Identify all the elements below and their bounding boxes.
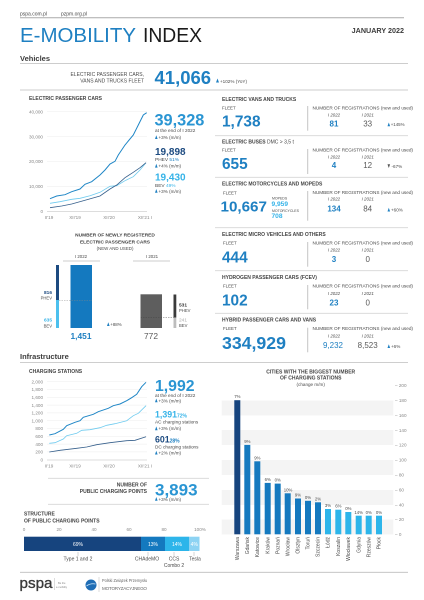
bar values: 0% — [275, 478, 281, 483]
panel: electric vans and trucks: I 2021 — [362, 112, 374, 117]
bar values: 6% — [335, 504, 342, 509]
logo: PZPM: MOTORYZACYJNEGO — [102, 586, 147, 591]
panel: hybrid cars: NUMBER OF REGISTRATIONS (new and used) — [312, 326, 413, 331]
panel: cities chart — [222, 369, 407, 561]
panel: electric buses: FLEET — [222, 148, 236, 153]
line chart: passenger cars: XII'20 — [103, 215, 115, 220]
panel: structure of public charging points: 0 — [23, 527, 26, 532]
logo: pspa: pspa — [20, 576, 53, 592]
panel: hybrid cars: I 2021 — [362, 333, 374, 338]
panel: structure of public charging points: Tesla — [189, 557, 201, 563]
stacked bar: 14% — [172, 542, 183, 548]
panel: electric vans and trucks: I 2022 — [328, 112, 341, 117]
line chart: charging stations: 1,400 — [32, 403, 43, 408]
stacked bar — [24, 537, 200, 551]
date: JANUARY 2022 — [352, 26, 404, 35]
bar values: 9% — [244, 439, 251, 444]
stacked bar: 13% — [148, 542, 159, 548]
logo: pspa: e-mobility — [56, 585, 68, 589]
panel: electric motorcycles and mopeds: 10,667 — [220, 199, 267, 216]
panel: structure of public charging points: CHAdeMO — [135, 557, 159, 563]
panel: micro vehicles: FLEET — [223, 241, 237, 246]
panel: micro vehicles: 0 — [365, 255, 370, 264]
panel: electric motorcycles and mopeds: 9,959 — [272, 201, 288, 208]
stat: public charging points: 3,893 — [155, 481, 198, 500]
panel: electric vans and trucks: ELECTRIC VANS AND TRUCKS — [222, 97, 297, 103]
line chart: passenger cars: 30,000 — [29, 134, 43, 139]
stacked bar: 4% — [191, 542, 198, 548]
bar: I 2021: PHEV — [179, 308, 191, 313]
panel: cities chart: (change m/m) — [297, 382, 325, 387]
line chart: charging stations: II'19 — [45, 464, 54, 468]
panel: charging stations — [29, 369, 199, 468]
panel: electric vans and trucks — [222, 97, 413, 131]
bar: I 2022: BEV — [44, 323, 52, 328]
line chart: passenger cars: XII'21 I — [138, 215, 152, 220]
axis labels — [395, 383, 407, 537]
panel: electric buses: I 2021 — [362, 154, 374, 159]
panel: hydrogen cars: 102 — [222, 293, 248, 310]
panel: electric motorcycles and mopeds: +60% — [391, 207, 403, 212]
bar values: 0% — [376, 510, 382, 515]
panel: hybrid cars: HYBRID PASSENGER CARS AND VANS — [222, 318, 317, 324]
panel: electric vans and trucks: 33 — [363, 120, 373, 129]
panel: cities chart: CITIES WITH THE BIGGEST NUMBER — [266, 369, 356, 375]
stat: AC stations: +3% (m/m) — [158, 426, 182, 431]
panel: electric buses: 12 — [363, 161, 373, 170]
panel: hybrid cars: +6% — [391, 344, 400, 349]
axis labels: – 40 — [395, 502, 404, 507]
panel: electric vans and trucks: 81 — [330, 120, 339, 129]
city labels — [235, 537, 383, 561]
stat: public charging points — [80, 481, 198, 502]
panel: structure of public charging points: 20 — [56, 527, 62, 532]
line chart: charging stations: 800 — [35, 426, 43, 431]
bar values: 9% — [295, 493, 301, 498]
line chart: charging stations: 400 — [35, 442, 43, 447]
bar: I 2022: 816 — [44, 290, 52, 296]
bar: I 2021: 241 — [179, 317, 187, 323]
stacked bar: 69% — [73, 542, 84, 548]
stat: DC stations: +2% (m/m) — [158, 450, 182, 456]
axis labels: – 120 — [395, 443, 407, 448]
line chart: charging stations: 2,000 — [32, 379, 43, 384]
axis labels: – 180 — [395, 398, 407, 403]
city labels: Poznań — [275, 537, 281, 554]
panel: electric buses: 655 — [222, 156, 248, 173]
axis labels: – 20 — [395, 517, 404, 522]
heading: vehicles: Vehicles — [20, 54, 50, 63]
panel: structure of public charging points: 40 — [91, 527, 97, 532]
stat: PHEV: 19,898 — [155, 147, 186, 158]
stat: BEV: +3% (m/m) — [158, 189, 182, 194]
panel: newly registered cars — [41, 233, 191, 341]
line chart: charging stations: 0 — [40, 458, 43, 463]
panel: hydrogen cars: NUMBER OF REGISTRATIONS (new and used) — [312, 283, 413, 288]
stat: public charging points: +3% (m/m) — [158, 497, 182, 502]
line chart: charging stations: XII'21 I — [138, 464, 152, 468]
bars — [234, 400, 382, 534]
panel: hydrogen cars: 23 — [330, 298, 339, 307]
panel: newly registered cars: ELECTRIC PASSENGER CARS — [80, 240, 151, 246]
stat: BEV: 19,430 — [155, 173, 186, 184]
panel: electric buses: 4 — [332, 161, 337, 170]
axis labels: – 140 — [395, 428, 407, 433]
panel: newly registered cars: NUMBER OF NEWLY REGISTERED — [75, 233, 155, 239]
panel: electric motorcycles and mopeds: NUMBER OF REGISTRATIONS (new and used) — [312, 190, 413, 195]
stat: PHEV — [155, 147, 186, 169]
city labels: Koszalin — [336, 537, 342, 556]
line chart: charging stations: 200 — [35, 450, 43, 455]
panel: electric passenger cars: ELECTRIC PASSENGER CARS — [29, 96, 103, 102]
city labels: Gdynia — [356, 537, 362, 553]
header links: pzpm.org.pl — [61, 12, 87, 18]
line chart: passenger cars: 0 — [40, 209, 43, 214]
panel: electric motorcycles and mopeds: I 2021 — [362, 197, 374, 202]
bar values: 0% — [366, 510, 372, 515]
stat: AC stations: AC charging stations — [155, 420, 199, 425]
city labels: Toruń — [306, 537, 312, 550]
line chart: charging stations: 600 — [35, 434, 43, 439]
total fleet callout: 41,066 — [154, 67, 211, 88]
panel: micro vehicles: NUMBER OF REGISTRATIONS (new and used) — [312, 241, 413, 246]
panel: structure of public charging points: 80 — [161, 527, 167, 532]
city labels: Szczecin — [316, 537, 322, 557]
panel: hydrogen cars: 0 — [365, 298, 370, 307]
panel: electric motorcycles and mopeds: 134 — [327, 205, 341, 214]
line chart: charging stations: XII'19 — [69, 464, 81, 468]
panel: micro vehicles: I 2021 — [362, 248, 374, 253]
stat: total stations: +3% (m/m) — [158, 398, 182, 403]
panel: structure of public charging points — [23, 512, 206, 569]
panel: electric buses: NUMBER OF REGISTRATIONS (new and used) — [312, 148, 413, 153]
city labels: Rzeszów — [366, 537, 372, 557]
panel: newly registered cars: I 2021 — [146, 254, 159, 259]
panel: cities chart: OF CHARGING STATIONS — [280, 376, 342, 382]
city labels: Warszawa — [235, 537, 241, 560]
stat: AC stations — [155, 410, 199, 431]
panel: electric motorcycles and mopeds: 84 — [363, 205, 373, 214]
stat: BEV: BEV 49% — [155, 183, 176, 189]
chart bands — [222, 400, 393, 534]
panel: newly registered cars: (NEW AND USED) — [97, 246, 134, 251]
axis labels: – 100 — [395, 458, 407, 463]
bar values: 0% — [305, 495, 311, 500]
panel: micro vehicles — [222, 232, 413, 267]
total fleet callout: +102% (YoY) — [220, 79, 247, 84]
axis labels: – 80 — [395, 472, 404, 478]
title: E-MOBILITY — [20, 25, 136, 47]
total fleet callout — [70, 67, 247, 88]
city labels: Kraków — [265, 537, 271, 554]
panel: electric vans and trucks: 1,738 — [222, 114, 261, 131]
stat: total stations: at the end of I 2022 — [155, 393, 196, 398]
bar values: 6% — [265, 477, 271, 482]
stat: DC stations — [155, 435, 199, 456]
panel: electric buses: -67% — [392, 164, 402, 169]
line chart: passenger cars — [29, 109, 152, 220]
city labels: Olsztyn — [296, 537, 302, 554]
bar: I 2022 — [41, 265, 92, 341]
stat: DC stations: 601 28% — [155, 435, 180, 445]
panel: hydrogen cars: I 2022 — [328, 291, 341, 296]
panel: structure of public charging points: 100% — [194, 527, 206, 532]
panel: structure of public charging points: Combo 2 — [164, 563, 184, 569]
line chart: charging stations: 1,200 — [32, 411, 43, 416]
panel: charging stations: CHARGING STATIONS — [29, 369, 83, 375]
panel: hybrid cars: FLEET — [223, 326, 237, 331]
logo: PZPM — [86, 577, 147, 592]
bar: I 2021: BEV — [179, 323, 188, 328]
stat: total passenger cars: 39,328 — [154, 112, 204, 130]
stat: DC stations: DC charging stations — [155, 444, 199, 450]
change: newly registered: +88% — [110, 322, 122, 327]
panel: hybrid cars: 334,929 — [222, 333, 286, 353]
panel: hydrogen cars: I 2021 — [362, 291, 374, 296]
logo: pspa — [20, 576, 68, 592]
logo: PZPM: Polski Związek Przemysłu — [102, 578, 147, 583]
line chart: passenger cars: 20,000 — [29, 159, 43, 164]
panel: micro vehicles: ELECTRIC MICRO VEHICLES AND OTHERS — [222, 232, 326, 238]
bar: I 2022: 1,451 — [71, 331, 92, 341]
title: INDEX — [143, 25, 202, 47]
total fleet callout: ELECTRIC PASSENGER CARS, — [70, 72, 144, 78]
stat: total passenger cars — [154, 112, 204, 140]
bar values: 9% — [254, 456, 261, 460]
panel: electric motorcycles and mopeds: I 2022 — [328, 197, 341, 202]
stat: total stations — [155, 378, 196, 403]
panel: electric motorcycles and mopeds: MOPEDS — [272, 197, 288, 201]
axis labels: – 0 — [395, 532, 402, 537]
line chart: charging stations — [32, 379, 152, 468]
line chart: charging stations: XII'20 — [103, 464, 115, 468]
line chart: charging stations: 1,800 — [32, 387, 43, 392]
panel: structure of public charging points: OF PUBLIC CHARGING POINTS — [24, 519, 100, 525]
bar: I 2022: 635 — [44, 318, 52, 324]
panel: electric motorcycles and mopeds: ELECTRIC MOTORCYCLES AND MOPEDS — [222, 182, 323, 188]
panel: hybrid cars: 8,523 — [358, 341, 378, 350]
stat: total passenger cars: +3% (m/m) — [158, 135, 182, 140]
panel: electric motorcycles and mopeds — [220, 182, 413, 221]
stat: total passenger cars: at the end of I 2022 — [155, 128, 196, 133]
panel: hydrogen cars — [222, 275, 413, 310]
line chart: charging stations: 1,600 — [32, 395, 43, 400]
total fleet callout: VANS AND TRUCKS FLEET — [80, 78, 144, 84]
bar values: 2% — [315, 496, 321, 502]
bar: I 2022: PHEV — [41, 296, 52, 301]
axis labels: – 60 — [395, 487, 404, 492]
city labels: Katowice — [255, 537, 261, 557]
header links: pspa.com.pl — [20, 12, 47, 18]
panel: electric motorcycles and mopeds: MOTORCYCLES — [272, 209, 300, 213]
stat: AC stations: 1,391 72% — [155, 410, 188, 420]
panel: electric passenger cars — [29, 96, 204, 220]
bar values: 14% — [354, 510, 363, 515]
line chart: passenger cars: XII'19 — [69, 215, 81, 220]
panel: electric vans and trucks: +145% — [391, 122, 405, 127]
bar: I 2021: 531 — [179, 303, 187, 309]
bar values: 7% — [234, 394, 241, 399]
panel: electric buses: I 2022 — [328, 154, 341, 159]
bar: I 2021: 772 — [144, 331, 158, 341]
panel: newly registered cars: I 2022 — [75, 254, 88, 259]
bar values: 10% — [284, 488, 292, 492]
line chart: passenger cars: II'19 — [45, 215, 54, 220]
title — [20, 25, 202, 47]
stat: total stations: 1,992 — [155, 378, 195, 395]
panel: micro vehicles: 444 — [222, 249, 248, 266]
stat: public charging points: PUBLIC CHARGING POINTS — [80, 489, 148, 495]
city labels: Łódź — [326, 537, 332, 548]
bar: I 2021 — [140, 294, 191, 341]
city labels: Gdańsk — [245, 537, 251, 554]
panel: electric motorcycles and mopeds: FLEET — [223, 190, 237, 195]
line chart: charging stations: 1,000 — [32, 418, 43, 423]
heading: infrastructure: Infrastructure — [20, 352, 69, 361]
panel: structure of public charging points: CCS — [169, 557, 180, 563]
city labels: Włocławek — [346, 537, 352, 561]
panel: micro vehicles: I 2022 — [328, 248, 341, 253]
panel: hydrogen cars: FLEET — [223, 283, 237, 288]
panel: hydrogen cars: HYDROGEN PASSENGER CARS (FCEV) — [222, 275, 317, 281]
stat: BEV — [155, 173, 186, 194]
stat: PHEV: PHEV 51% — [155, 157, 180, 163]
panel: electric motorcycles and mopeds: 708 — [272, 213, 283, 220]
stat: PHEV: +4% (m/m) — [158, 164, 182, 169]
header links — [20, 12, 87, 18]
line chart: passenger cars: 10,000 — [29, 184, 43, 189]
city labels: Wrocław — [285, 537, 291, 556]
panel: structure of public charging points: STRUCTURE — [24, 512, 55, 518]
bar values: 3% — [325, 503, 331, 508]
logo: pspa: Be the — [58, 581, 66, 585]
axis labels: – 200 — [395, 383, 407, 388]
panel: electric vans and trucks: NUMBER OF REGISTRATIONS (new and used) — [312, 106, 413, 111]
panel: structure of public charging points: 60 — [126, 527, 132, 532]
panel: electric vans and trucks: FLEET — [222, 106, 236, 111]
panel: hybrid cars — [222, 318, 413, 353]
panel: electric buses — [222, 139, 413, 174]
panel: electric buses: ELECTRIC BUSES DMC > 3,5 t — [222, 139, 294, 145]
axis labels: – 160 — [395, 413, 407, 418]
panel: micro vehicles: 3 — [332, 255, 337, 264]
panel: hybrid cars: 9,232 — [323, 341, 344, 350]
bar values — [234, 394, 382, 515]
line chart: passenger cars: 40,000 — [29, 109, 43, 114]
panel: structure of public charging points: Type 1 and 2 — [64, 557, 93, 563]
panel: hybrid cars: I 2022 — [328, 333, 341, 338]
bar values: 0% — [345, 506, 352, 511]
stat: public charging points: NUMBER OF — [117, 483, 147, 489]
city labels: Płock — [377, 537, 383, 549]
